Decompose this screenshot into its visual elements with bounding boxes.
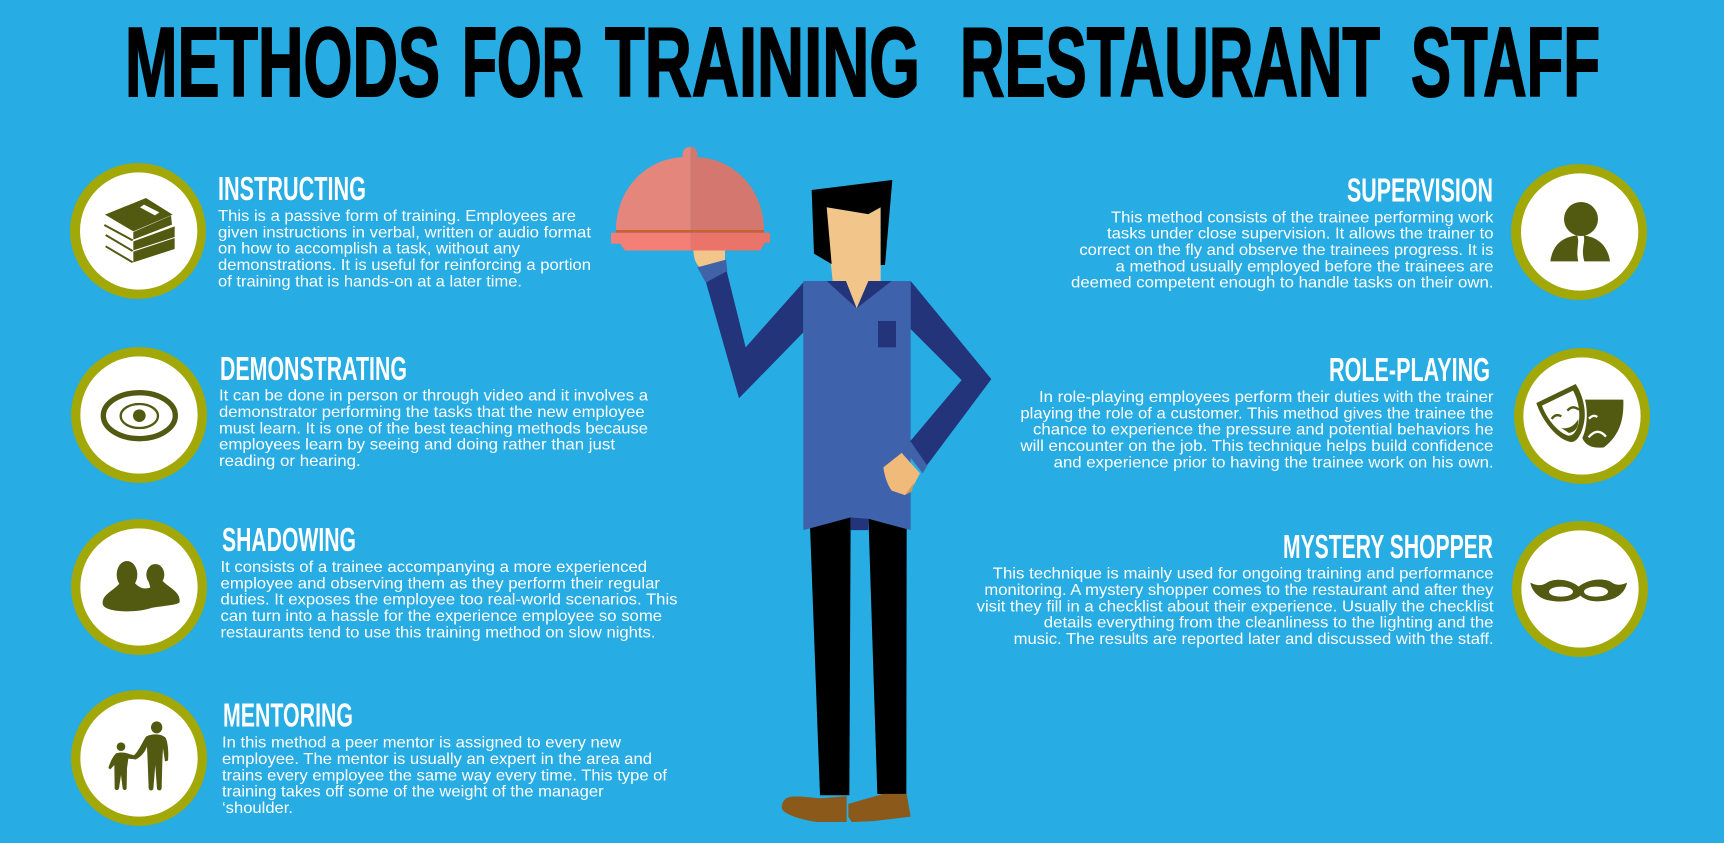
text block: instructing: This is a passive form of training. Employees are xyxy=(218,208,576,225)
panel: shadowing xyxy=(71,519,678,655)
text block: shadowing: duties. It exposes the employee too real-world scenarios. This xyxy=(220,592,678,609)
title: FOR xyxy=(462,7,583,117)
text block: role-playing: chance to experience the pressure and potential behaviors he xyxy=(1033,422,1494,439)
text block: demonstrating: reading or hearing. xyxy=(219,453,361,470)
text block: supervision: deemed competent enough to handle tasks on their own. xyxy=(1071,275,1494,292)
text block: role-playing: will encounter on the job. This technique helps build confidence xyxy=(1019,438,1494,455)
text block: demonstrating: demonstrator performing the tasks that the new employee xyxy=(219,404,645,421)
text block: role-playing: In role-playing employees perform their duties with the trainer xyxy=(1039,389,1494,406)
text block: demonstrating: It can be done in person or through video and it involves a xyxy=(219,388,648,405)
text block: mentoring: ‘shoulder. xyxy=(222,800,293,817)
text block: mentoring: employee. The mentor is usually an expert in the area and xyxy=(222,751,652,768)
text block: mentoring: trains every employee the same way every time. This type of xyxy=(222,767,668,784)
title xyxy=(125,7,1600,117)
heading: role-playing: ROLE-PLAYING xyxy=(1329,351,1490,388)
text block: supervision: tasks under close supervision. It allows the trainer to xyxy=(1107,226,1494,243)
panel: demonstrating xyxy=(71,347,648,483)
text block: mystery shopper: visit they fill in a checklist about their experience. Usually the checklist xyxy=(977,598,1494,615)
icon: two people xyxy=(71,519,207,655)
text block: mentoring: training takes off some of the weight of the manager xyxy=(222,784,604,801)
heading: mystery shopper: MYSTERY SHOPPER xyxy=(1283,528,1493,565)
text block: supervision: This method consists of the trainee performing work xyxy=(1111,209,1495,226)
title: TRAINING xyxy=(605,7,920,117)
icon: adult holding child's hand xyxy=(71,690,207,826)
text block: shadowing: employee and observing them as they perform their regular xyxy=(220,575,661,592)
text block: shadowing: It consists of a trainee accompanying a more experienced xyxy=(220,559,647,576)
text block: role-playing: playing the role of a customer. This method gives the trainee the xyxy=(1020,405,1494,422)
text block: mystery shopper: This technique is mainly used for ongoing training and performance xyxy=(993,566,1494,583)
title: RESTAURANT xyxy=(960,7,1380,117)
panel: mystery shopper xyxy=(977,521,1648,657)
heading: shadowing: SHADOWING xyxy=(222,521,356,558)
text block: supervision: correct on the fly and observe the trainees progress. It is xyxy=(1079,242,1493,259)
text block: instructing: given instructions in verbal, written or audio format xyxy=(218,224,592,241)
panel: role-playing xyxy=(1019,348,1650,484)
arm on hip xyxy=(883,281,991,495)
heading: supervision: SUPERVISION xyxy=(1347,172,1493,209)
illustration: waiter holding a cloche xyxy=(611,147,991,822)
title: METHODS xyxy=(125,7,440,117)
text block: instructing xyxy=(218,208,592,290)
text block: mystery shopper xyxy=(977,566,1494,648)
heading: mentoring: MENTORING xyxy=(223,697,353,734)
text block: demonstrating: employees learn by seeing and doing rather than just xyxy=(219,437,616,454)
raised arm xyxy=(697,260,803,398)
text block: supervision xyxy=(1071,209,1495,292)
text block: demonstrating: must learn. It is one of the best teaching methods because xyxy=(219,420,648,437)
cloche xyxy=(611,147,770,250)
text block: mentoring xyxy=(222,735,668,817)
icon: stack of books xyxy=(70,163,206,299)
text block: instructing: of training that is hands-on at a later time. xyxy=(218,273,522,290)
text block: role-playing: and experience prior to having the trainee work on his own. xyxy=(1054,454,1494,471)
panel: instructing xyxy=(70,163,592,299)
text block: shadowing: restaurants tend to use this training method on slow nights. xyxy=(220,624,656,641)
head xyxy=(812,180,892,308)
icon: domino mask xyxy=(1512,521,1648,657)
text block: mystery shopper: details everything from the cleanliness to the lighting and the xyxy=(1044,615,1494,632)
text block: mentoring: In this method a peer mentor is assigned to every new xyxy=(222,735,621,752)
text block: shadowing: can turn into a hassle for the experience employee so some xyxy=(220,608,662,625)
text block: mystery shopper: music. The results are reported later and discussed with the staff. xyxy=(1014,631,1494,648)
icon: eye xyxy=(71,347,207,483)
text block: role-playing xyxy=(1019,389,1494,471)
heading: demonstrating: DEMONSTRATING xyxy=(220,350,407,387)
text block: mystery shopper: monitoring. A mystery shopper comes to the restaurant and after they xyxy=(984,582,1493,599)
shirt xyxy=(803,281,911,530)
heading: instructing: INSTRUCTING xyxy=(218,170,366,207)
raised hand xyxy=(693,250,725,267)
text block: supervision: a method usually employed before the trainees are xyxy=(1116,258,1494,275)
text block: shadowing xyxy=(220,559,678,641)
panel: mentoring xyxy=(71,690,668,826)
icon: theatre masks xyxy=(1514,348,1650,484)
shoes xyxy=(782,794,911,822)
panel: supervision xyxy=(1071,164,1647,300)
title: STAFF xyxy=(1411,7,1600,117)
text block: instructing: demonstrations. It is useful for reinforcing a portion xyxy=(218,257,591,274)
icon: person with tie xyxy=(1511,164,1647,300)
text block: demonstrating xyxy=(219,388,648,470)
trousers xyxy=(810,514,907,795)
text block: instructing: on how to accomplish a task, without any xyxy=(218,241,520,258)
